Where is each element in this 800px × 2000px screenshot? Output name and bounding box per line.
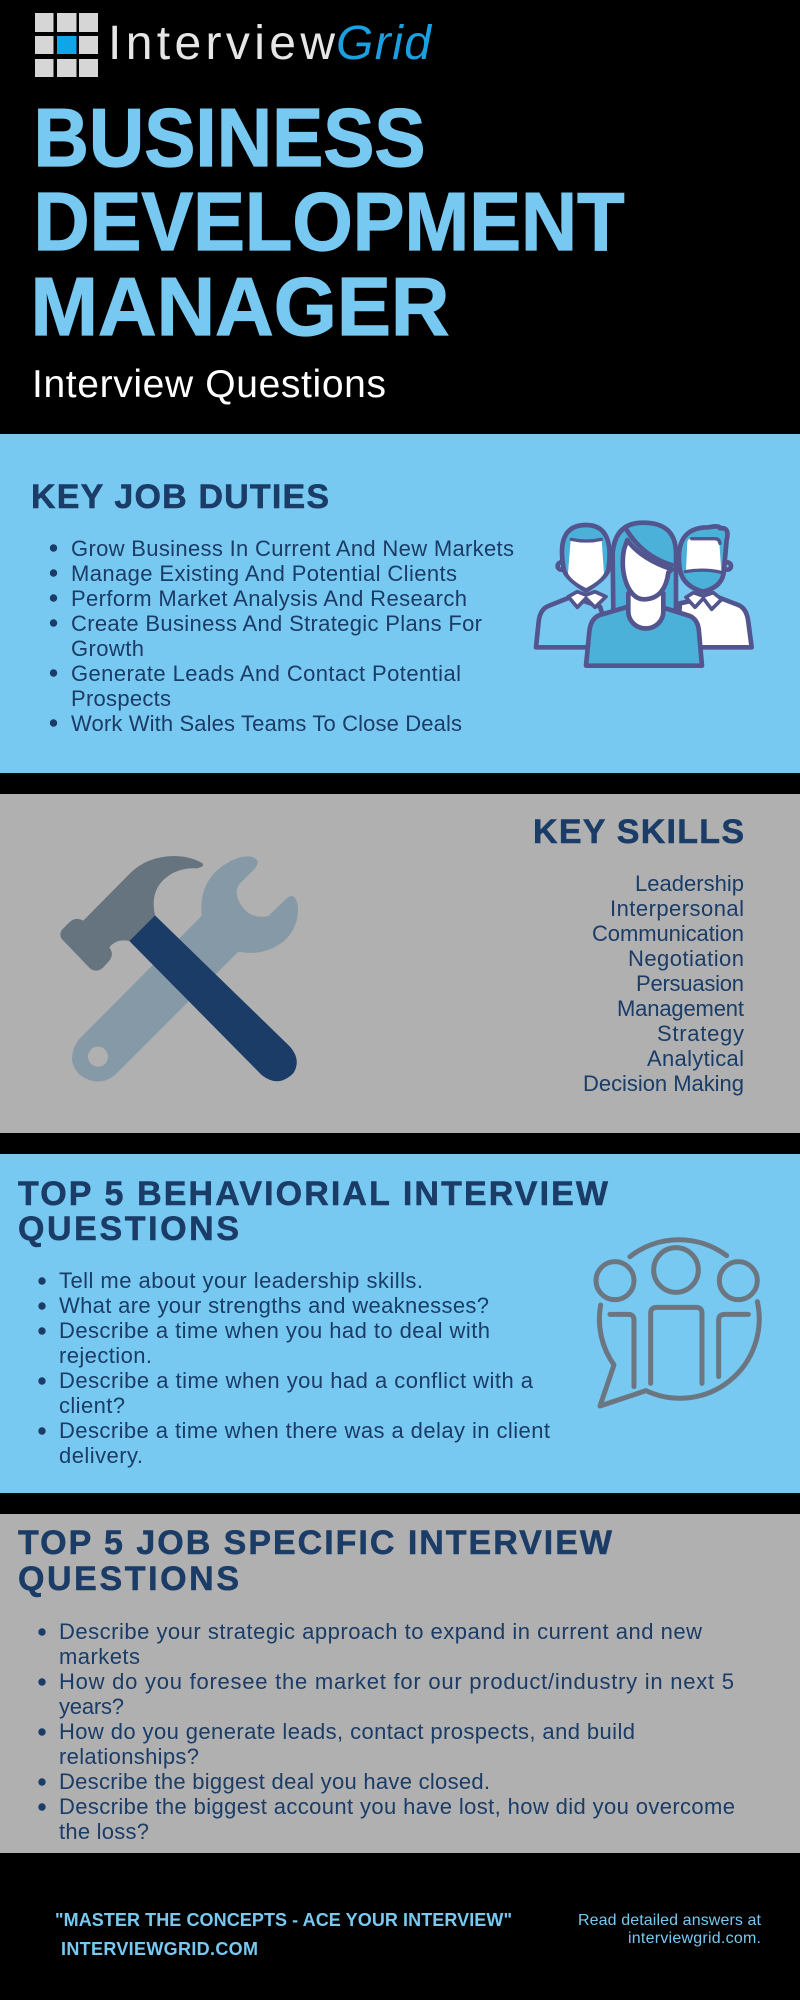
heading: key skills: KEY SKILLS [533,813,744,851]
icon: three people [536,523,752,666]
behavioral questions list: rejection. [59,1343,152,1368]
panel: key skills [0,794,800,1133]
duties list: Create Business And Strategic Plans For [71,611,482,636]
skills list: Negotiation [628,946,744,971]
skills list: Leadership [635,871,744,896]
logo wordmark: Interview [108,17,335,70]
job specific questions list: years? [59,1694,124,1719]
duties list: Generate Leads And Contact Potential [71,661,461,686]
skills list [583,871,744,1096]
job specific questions list [38,1619,735,1844]
heading: behavioral questions [18,1175,609,1248]
duties list: Work With Sales Teams To Close Deals [71,711,462,736]
behavioral questions list: client? [59,1393,125,1418]
title: DEVELOPMENT [34,175,624,268]
wrench [72,856,298,1082]
duties list: Grow Business In Current And New Markets [71,536,514,561]
skills list: Management [617,996,744,1021]
heading: key job duties: KEY JOB DUTIES [31,478,329,516]
behavioral questions list: Describe a time when you had to deal with [59,1318,490,1343]
heading: job specific questions: TOP 5 JOB SPECIFIC INTERVIEW [18,1524,613,1562]
hammer handle [129,915,297,1081]
hammer head [60,856,203,971]
heading: behavioral questions: QUESTIONS [18,1210,239,1248]
title [30,91,624,353]
logo wordmark: Grid [336,17,432,70]
panel: behavioral questions [0,1154,800,1493]
duties list: Growth [71,636,144,661]
panel: job specific questions [0,1514,800,1853]
subtitle: Interview Questions [32,363,386,406]
footer note: Read detailed answers at [578,1912,762,1929]
footer note [578,1912,762,1947]
behavioral questions list [38,1268,550,1468]
header [30,13,624,406]
heading: job specific questions [18,1524,613,1598]
behavioral questions list: delivery. [59,1443,143,1468]
behavioral questions list: Describe a time when you had a conflict with a [59,1368,534,1393]
footer note: interviewgrid.com. [628,1930,761,1947]
footer slogan: "MASTER THE CONCEPTS - ACE YOUR INTERVIEW" [55,1910,512,1930]
logo [35,13,432,77]
job specific questions list: How do you generate leads, contact prospects, and build [59,1719,635,1744]
behavioral questions list: Tell me about your leadership skills. [59,1268,423,1293]
job specific questions list: Describe the biggest account you have lost, how did you overcome [59,1794,735,1819]
icon: hammer and wrench [60,856,298,1082]
skills list: Communication [592,921,744,946]
title: MANAGER [30,260,450,353]
duties list: Prospects [71,686,171,711]
heading: job specific questions: QUESTIONS [18,1560,239,1598]
skills list: Decision Making [583,1071,744,1096]
behavioral questions list: What are your strengths and weaknesses? [59,1293,489,1318]
job specific questions list: How do you foresee the market for our product/industry in next 5 [59,1669,734,1694]
footer slogan [55,1910,512,1959]
panel: key job duties [0,434,800,773]
heading: behavioral questions: TOP 5 BEHAVIORIAL INTERVIEW [18,1175,609,1213]
skills list: Analytical [647,1046,744,1071]
footer slogan: INTERVIEWGRID.COM [61,1939,258,1959]
job specific questions list: Describe the biggest deal you have closed. [59,1769,490,1794]
skills list: Interpersonal [610,896,744,921]
duties list: Manage Existing And Potential Clients [71,561,457,586]
logo grid icon [35,13,98,77]
duties list [50,536,514,736]
job specific questions list: the loss? [59,1819,149,1844]
title: BUSINESS [34,91,426,184]
behavioral questions list: Describe a time when there was a delay in client [59,1418,550,1443]
job specific questions list: Describe your strategic approach to expand in current and new [59,1619,702,1644]
job specific questions list: markets [59,1644,140,1669]
duties list: Perform Market Analysis And Research [71,586,467,611]
job specific questions list: relationships? [59,1744,199,1769]
footer [55,1910,762,1959]
skills list: Strategy [657,1021,744,1046]
icon: speech bubble with three people [596,1240,759,1406]
skills list: Persuasion [636,971,744,996]
